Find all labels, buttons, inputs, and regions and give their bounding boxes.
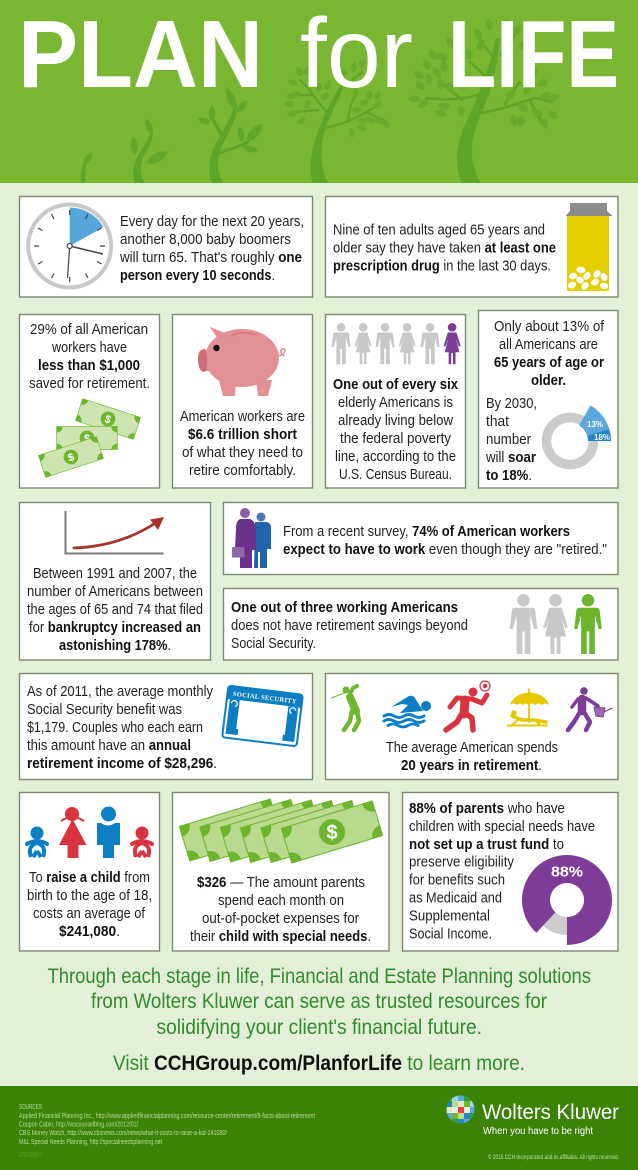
text: bankruptcy: the ages of 65 and 74 that filed	[27, 601, 203, 618]
closing statement: solidifying your client's financial future.	[156, 1016, 482, 1039]
text: by 2030: By 2030,	[486, 395, 537, 412]
icon: dollar bills: $	[84, 433, 90, 445]
text: piggy bank: $6.6 trillion short	[188, 426, 297, 443]
text: 13 percent	[494, 318, 605, 389]
panel: 13 percent	[478, 310, 618, 488]
closing statement	[48, 965, 591, 1075]
panel: baby boomers clock	[20, 196, 312, 297]
text: raising a child: costs an average of	[33, 905, 146, 922]
text: social security: this amount have an annual	[27, 737, 191, 754]
text: bankruptcy: Between 1991 and 2007, the	[33, 565, 197, 582]
title: PLAN	[18, 1, 263, 108]
text: bankruptcy	[27, 565, 203, 654]
text: trust fund: as Medicaid and	[409, 890, 502, 906]
text: bankruptcy: astonishing 178%.	[59, 637, 171, 654]
panel: prescription drugs	[326, 196, 618, 297]
chart: 88 percent donut: 88%	[551, 864, 583, 880]
text: 13 percent: all Americans are	[499, 336, 598, 353]
text: poverty: elderly Americans is	[338, 394, 453, 411]
sources: ATA-0000-X	[19, 1152, 43, 1159]
text: special needs cost: spend each month on	[218, 892, 344, 909]
text: poverty: the federal poverty	[340, 430, 451, 447]
text: social security: retirement income of $28,296.	[27, 755, 217, 772]
panel: bankruptcy	[20, 502, 210, 660]
icon: social security card	[221, 685, 304, 747]
text: poverty	[333, 376, 459, 483]
sources	[19, 1104, 315, 1159]
text: trust fund: Supplemental	[409, 908, 490, 924]
text: prescription	[333, 222, 556, 274]
icon: three people	[510, 594, 602, 654]
chart: rising line	[66, 511, 164, 554]
icon: clock	[28, 204, 111, 288]
text: bankruptcy: for bankruptcy increased an	[29, 619, 201, 636]
text: savings	[29, 321, 150, 392]
icon: dollar bills	[39, 399, 140, 477]
text: trust fund: Social Income.	[409, 926, 492, 942]
icon: growing trees	[81, 18, 561, 184]
text: piggy bank: retire comfortably.	[189, 462, 296, 479]
text: by 2030: that	[486, 413, 510, 430]
icon: tennis player	[446, 681, 490, 730]
icon: business people	[232, 508, 271, 568]
text: piggy bank	[180, 408, 305, 479]
text: baby boomers	[119, 213, 304, 284]
sources: CBS Money Watch, http://www.cbsnews.com/news/what-it-costs-to-raise-a-kid-241080/	[19, 1130, 227, 1137]
text: bankruptcy: number of Americans between	[27, 583, 203, 600]
sources: SOURCES:	[19, 1104, 43, 1111]
icon: social security card: SOCIAL SECURITY	[233, 691, 297, 706]
logo: Wolters Kluwer: When you have to be right	[483, 1126, 593, 1137]
text: expect to work: From a recent survey, 74% of American workers	[283, 523, 570, 540]
text: special needs cost: their child with special needs.	[190, 928, 371, 945]
logo: Wolters Kluwer	[446, 1095, 619, 1137]
closing statement: from Wolters Kluwer can serve as trusted resources for	[91, 990, 547, 1013]
panel: trust fund	[402, 792, 618, 951]
text: savings: 29% of all American	[30, 321, 148, 338]
chart: 88 percent donut	[522, 855, 612, 945]
text: piggy bank: American workers are	[180, 408, 305, 425]
icon: pill bottle	[566, 203, 612, 292]
icon: gardener	[568, 687, 612, 730]
text: 13 percent: older.	[531, 372, 566, 389]
title: for	[300, 0, 413, 108]
text: one out of three: Social Security.	[231, 635, 316, 652]
text: by 2030: number	[486, 431, 531, 448]
text: social security: $1,179. Couples who each earn	[27, 719, 203, 736]
panel: retirement savings	[20, 314, 160, 488]
text: savings: saved for retirement.	[29, 375, 150, 392]
text: savings: less than $1,000	[38, 357, 140, 374]
chart: population donut: 13%	[587, 420, 603, 429]
chart: population donut: 18%	[594, 433, 610, 442]
sources: M&L Special Needs Planning, http://specialneedsplanning.net	[19, 1139, 162, 1146]
text: 13 percent: 65 years of age or	[494, 354, 604, 371]
text: prescription: Nine of ten adults aged 65 years and	[333, 222, 545, 238]
text: years in retirement	[386, 739, 558, 774]
text: social security: Social Security benefit was	[27, 701, 182, 718]
footer	[0, 1086, 638, 1170]
icon: golfer	[332, 686, 359, 730]
icon: dollar bills: $	[67, 451, 76, 464]
text: trust fund: 88% of parents who have	[409, 800, 565, 817]
icon: dollar bills: $	[103, 413, 112, 426]
text: by 2030: will soar	[485, 449, 536, 466]
panel: raising a child	[20, 792, 160, 951]
panel: years in retirement	[326, 674, 618, 780]
text: poverty: already living below	[338, 412, 453, 429]
text: by 2030	[485, 395, 537, 484]
text: by 2030: to 18%.	[486, 467, 532, 484]
text: baby boomers: another 8,000 baby boomers	[120, 231, 291, 248]
header banner	[0, 0, 638, 184]
text: one out of three	[231, 599, 468, 652]
icon: swimmer	[384, 696, 431, 727]
text: expect to work	[283, 523, 607, 558]
text: piggy bank: of what they need to	[182, 444, 303, 461]
text: years in retirement: The average American spends	[386, 739, 558, 756]
text: prescription: prescription drug in the last 30 days.	[333, 258, 551, 274]
sources: Coupon Cabin, http://wscounselblog.com/2012/01/	[19, 1122, 138, 1128]
text: social security: As of 2011, the average monthly	[27, 683, 213, 700]
text: baby boomers: Every day for the next 20 years,	[120, 213, 304, 230]
logo: Wolters Kluwer: Wolters Kluwer	[482, 1101, 619, 1124]
text: poverty: U.S. Census Bureau.	[339, 466, 452, 483]
text: baby boomers: will turn 65. That's roughly one	[119, 249, 302, 266]
sources: Applied Financial Planning Inc., http://www.appliedfinancialplanning.com/resource-center/retirement/9-facts-about-retirement	[19, 1113, 315, 1120]
icon: piggy bank	[198, 327, 285, 396]
text: raising a child: To raise a child from	[29, 869, 150, 886]
panel: one out of six	[326, 314, 466, 488]
title	[18, 0, 619, 108]
icon: family	[27, 806, 152, 858]
text: 13 percent: Only about 13% of	[494, 318, 605, 335]
text: trust fund: children with special needs have	[409, 818, 595, 835]
text: special needs cost: $326 — The amount parents	[197, 874, 365, 891]
text: one out of three: does not have retirement savings beyond	[231, 617, 468, 634]
text: savings: workers have	[51, 339, 127, 356]
panel: piggy bank	[172, 314, 312, 488]
text: expect to work: expect to have to work even though they are "retired."	[283, 541, 607, 558]
text: special needs cost: out-of-pocket expenses for	[202, 910, 359, 927]
text: trust fund: for benefits such	[409, 872, 505, 888]
text: trust fund	[409, 800, 595, 942]
panel: special needs cost	[172, 792, 389, 951]
panel: expect to work	[224, 502, 618, 574]
text: one out of three: One out of three working Americans	[231, 599, 458, 616]
text: years in retirement: 20 years in retirement.	[401, 757, 542, 774]
text: raising a child: birth to the age of 18,	[27, 887, 152, 904]
text: poverty: line, according to the	[335, 448, 456, 465]
text: social security	[27, 683, 217, 772]
text: trust fund: not set up a trust fund to	[409, 836, 564, 853]
icon: beach umbrella	[508, 689, 549, 726]
panel: one out of three	[224, 588, 618, 660]
text: poverty: One out of every six	[333, 376, 459, 393]
chart: population donut	[546, 406, 611, 464]
icon: stack of bills	[179, 799, 383, 863]
text: special needs cost	[190, 874, 371, 945]
panel: social security	[20, 674, 312, 780]
icon: six people	[332, 323, 461, 364]
text: raising a child: $241,080.	[59, 923, 120, 940]
icon: stack of bills: $	[326, 822, 338, 844]
text: raising a child	[27, 869, 152, 940]
text: prescription: older say they have taken at least one	[333, 240, 556, 256]
closing statement: Visit CCHGroup.com/PlanforLife to learn more.	[113, 1052, 525, 1075]
text: baby boomers: person every 10 seconds.	[120, 267, 275, 284]
text: trust fund: preserve eligibility	[409, 854, 514, 870]
